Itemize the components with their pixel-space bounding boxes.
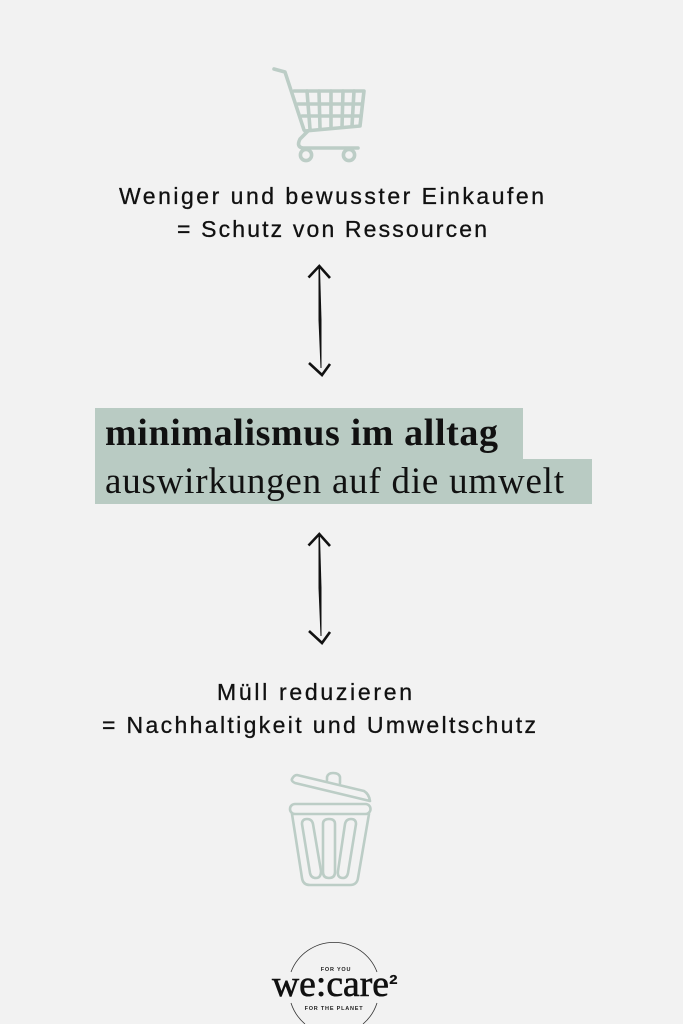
text: waste statement: = Nachhaltigkeit und Umweltschutz [102, 712, 536, 738]
logo: we:care: FOR THE PLANET [305, 1006, 363, 1012]
text: waste statement: Müll reduzieren [217, 679, 412, 705]
text: waste statement [102, 679, 536, 738]
panel: title block [95, 408, 592, 504]
heading: subtitle: auswirkungen auf die umwelt [105, 461, 565, 502]
arrow: upper double-headed [308, 266, 330, 375]
logo: we:care: FOR YOU [321, 967, 351, 973]
logo: we:care [272, 942, 398, 1024]
icon: shopping cart [274, 69, 364, 161]
heading: title: minimalismus im alltag [105, 412, 498, 454]
arrow: lower double-headed [308, 534, 330, 643]
text: shopping statement: Weniger und bewusster Einkaufen [119, 183, 544, 209]
logo: we:care: we:care [272, 964, 389, 1005]
text: shopping statement: = Schutz von Ressourcen [177, 216, 487, 242]
text: shopping statement [119, 183, 544, 242]
icon: trash can [290, 773, 370, 885]
logo: we:care: ² [389, 969, 398, 999]
